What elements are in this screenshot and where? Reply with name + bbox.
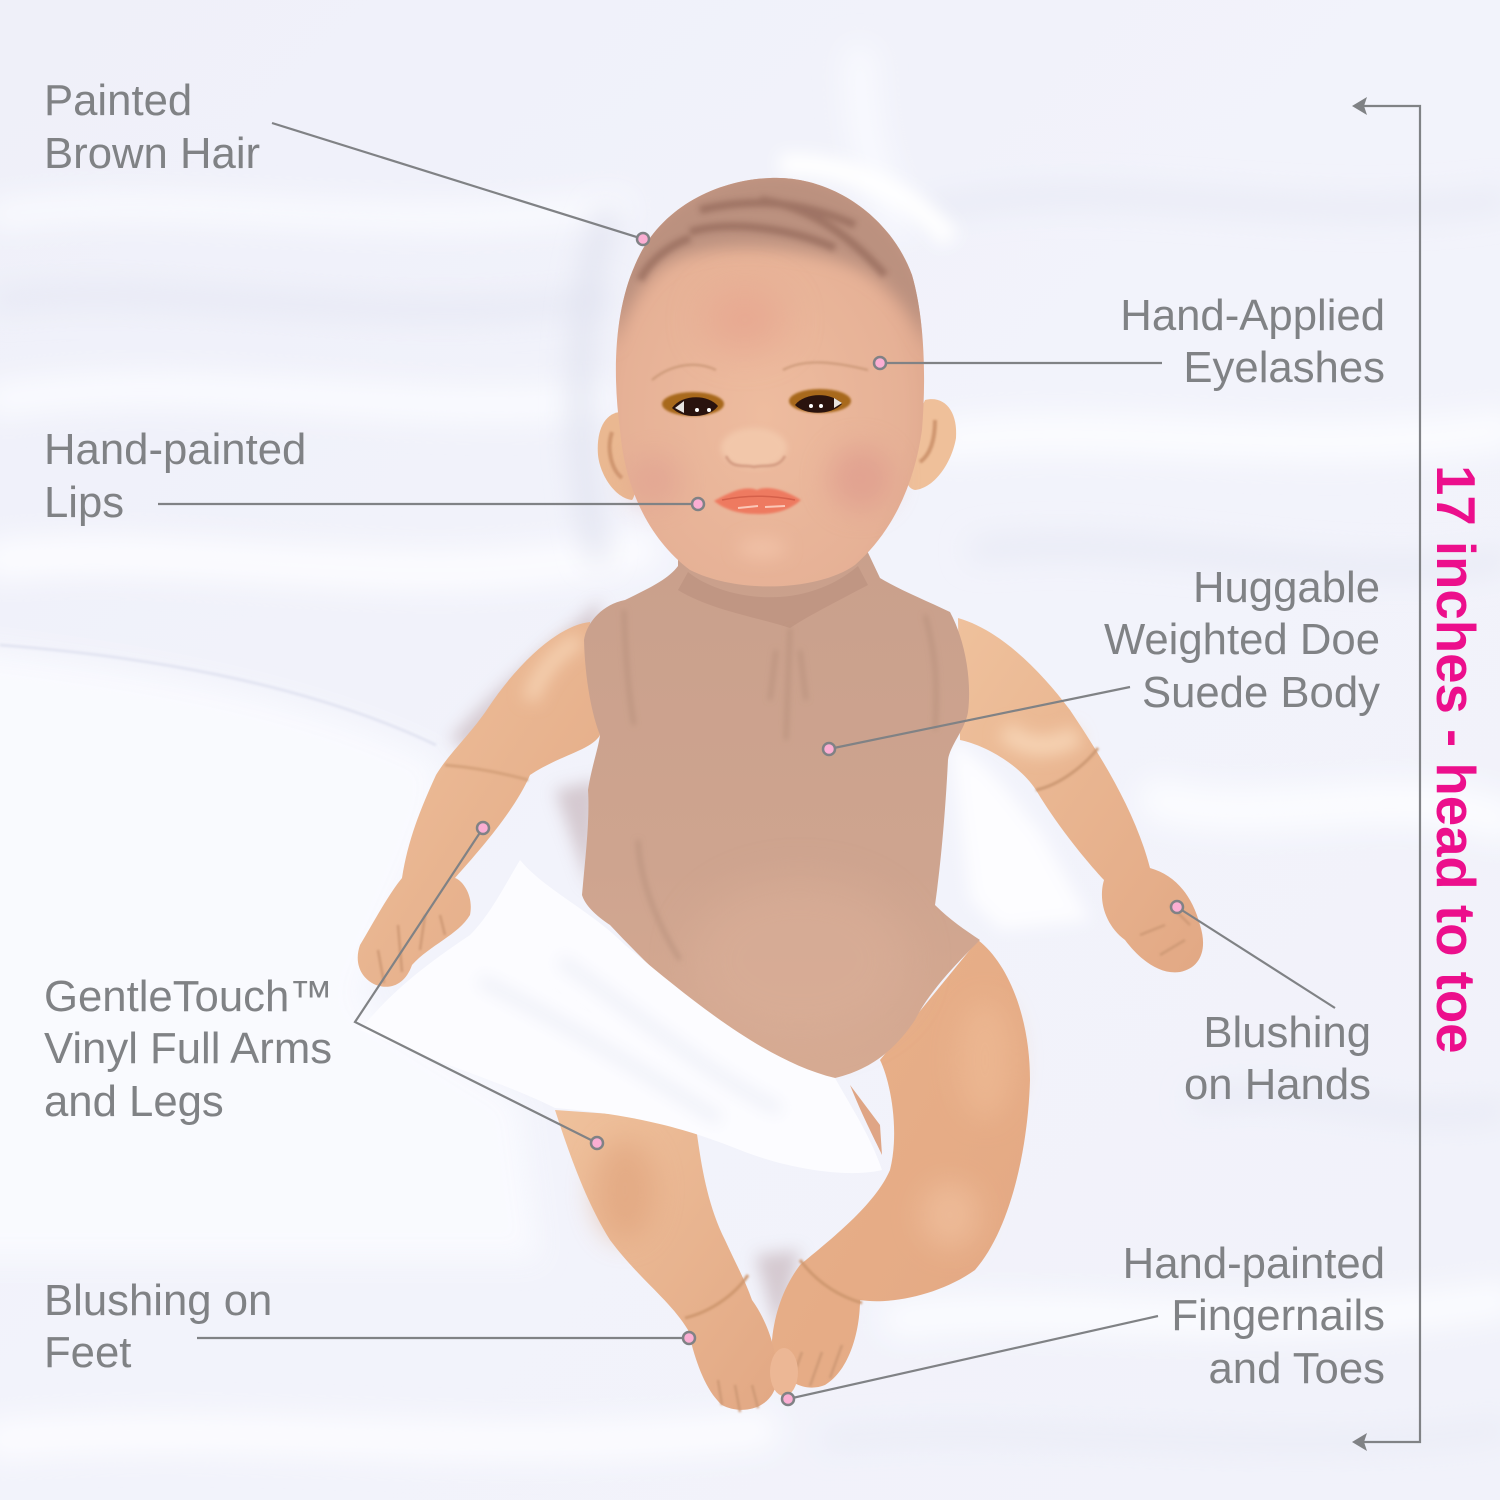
- label: Hand-Applied Eyelashes: Eyelashes: [1183, 343, 1385, 392]
- doll illustration: [358, 170, 1203, 1412]
- label: Huggable Weighted Doe Suede Body: Huggable: [1193, 563, 1380, 612]
- label: Hand-painted Lips: [44, 425, 704, 527]
- label: GentleTouch Vinyl Full Arms and Legs: GentleTouch™: [44, 972, 333, 1021]
- label: Painted Brown Hair: Brown Hair: [44, 129, 260, 178]
- label: Painted Brown Hair: [44, 76, 649, 245]
- label: Hand-painted Fingernails and Toes: [782, 1239, 1385, 1405]
- ear: left: [598, 412, 637, 500]
- ear: right: [907, 399, 956, 490]
- leg: viewer's left: [555, 1110, 777, 1410]
- label: Blushing on Hands: [1171, 901, 1371, 1109]
- label: Hand-painted Fingernails and Toes: Fingernails: [1171, 1291, 1385, 1340]
- nose: [721, 428, 787, 468]
- label: Blushing on Feet: [44, 1276, 695, 1377]
- label: Huggable Weighted Doe Suede Body: [823, 563, 1380, 755]
- leg: viewer's right: [772, 940, 1030, 1388]
- hair: [618, 178, 922, 340]
- eyebrows: [652, 362, 868, 380]
- shadows under doll: [450, 600, 800, 1340]
- label: Blushing on Feet: Blushing on: [44, 1276, 272, 1325]
- label: Blushing on Hands: Blushing: [1203, 1008, 1371, 1057]
- arm: viewer's right: [958, 618, 1203, 972]
- label: Huggable Weighted Doe Suede Body: Suede Body: [1142, 668, 1380, 717]
- label: Huggable Weighted Doe Suede Body: Weighted Doe: [1104, 615, 1380, 664]
- bracket arrow: head to toe measure: [1352, 97, 1420, 1451]
- head: [616, 178, 924, 586]
- forehead and cheeks blush: [705, 290, 785, 350]
- lips: [714, 488, 801, 514]
- label: Blushing on Hands: on Hands: [1184, 1060, 1371, 1109]
- label: Hand-painted Lips: Lips: [44, 478, 124, 527]
- label: Hand-painted Fingernails and Toes: Hand-painted: [1123, 1239, 1385, 1288]
- label: Hand-painted Fingernails and Toes: and Toes: [1208, 1344, 1385, 1393]
- label: Hand-Applied Eyelashes: Hand-Applied: [1120, 291, 1385, 340]
- vertical heading: 17 inches - head to toe: 17 inches - head to toe: [1425, 465, 1486, 1054]
- suede body: [582, 540, 980, 1078]
- white blanket across legs: [360, 860, 882, 1173]
- label: GentleTouch Vinyl Full Arms and Legs: [44, 822, 603, 1149]
- label: Painted Brown Hair: Painted: [44, 76, 192, 125]
- label: Blushing on Feet: Feet: [44, 1328, 131, 1377]
- label: Hand-Applied Eyelashes: [874, 291, 1385, 392]
- label: Hand-painted Lips: Hand-painted: [44, 425, 306, 474]
- eyes: [662, 389, 851, 416]
- arm: viewer's left: [358, 622, 600, 987]
- label: GentleTouch Vinyl Full Arms and Legs: Vinyl Full Arms: [44, 1024, 332, 1073]
- label: GentleTouch Vinyl Full Arms and Legs: and Legs: [44, 1077, 224, 1126]
